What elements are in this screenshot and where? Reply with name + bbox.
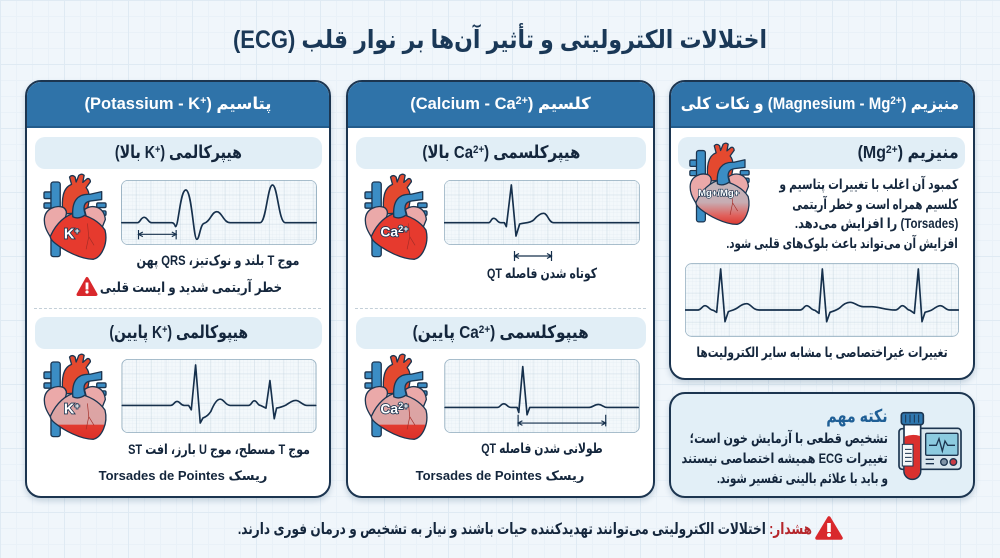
icon: heart K+: K — [64, 227, 74, 243]
potassium panel header: Potassium - K+ — [90, 95, 206, 113]
ECG chart: hypercalcemia — [444, 180, 640, 245]
icon: heart Ca2+ low: Ca — [380, 400, 398, 416]
icon: heart K+ low — [43, 354, 107, 440]
potassium panel header — [27, 82, 329, 128]
potassium panel header: پتاسیم () — [85, 95, 271, 113]
hypokalemia caption: موج T مسطح، موج U بارز، افت ST — [128, 441, 310, 457]
magnesium description: کمبود آن اغلب با تغییرات پتاسیم و — [779, 176, 958, 192]
hypercalcemia heading — [356, 137, 646, 169]
icon: heart K+: + — [74, 226, 80, 236]
magnesium heading — [678, 137, 965, 169]
QT short arrow — [513, 251, 553, 261]
calcium panel header — [348, 82, 653, 128]
magnesium description: (Torsades) را افزایش می‌دهد. — [795, 215, 958, 231]
hypercalcemia heading: هیپرکلسمی (Ca2+ بالا) — [422, 142, 580, 162]
icon: heart Mg — [689, 142, 750, 225]
icon: heart Ca2+ — [364, 174, 428, 260]
panel: important note — [669, 392, 975, 498]
panel: potassium — [25, 80, 331, 498]
icon: blood test tube and monitor — [898, 412, 962, 480]
hypocalcemia caption: طولانی شدن فاصله QT — [481, 440, 603, 456]
hypokalemia risk: ریسک Torsades de Pointes — [99, 468, 267, 483]
magnesium description — [727, 176, 958, 252]
warning footer text: هشدار: اختلالات الکترولیتی می‌توانند تهدیدکننده حیات باشند و نیاز به تشخیص و درمان فوری دارند. — [238, 521, 812, 538]
hyperkalemia heading: هیپرکالمی (K+ بالا) — [115, 142, 242, 162]
magnesium caption: تغییرات غیراختصاصی یا مشابه سایر الکترولیت‌ها — [696, 344, 948, 360]
calcium panel header: کلسیم () — [410, 95, 591, 113]
magnesium heading: منیزیم (Mg2+) — [858, 142, 959, 162]
hypocalcemia heading — [356, 317, 646, 349]
note text — [682, 430, 888, 486]
icon: footer warning triangle — [815, 516, 843, 540]
icon: heart Mg: Mg+/Mg+ — [698, 188, 740, 199]
hyperkalemia caption: موج T بلند و نوک‌تیز، QRS پهن — [136, 252, 300, 268]
ECG chart: hypocalcemia — [444, 359, 640, 433]
icon: heart K+ low: + — [74, 401, 80, 411]
hypercalcemia caption: کوتاه شدن فاصله QT — [487, 265, 597, 281]
note title: نکته مهم — [827, 406, 888, 426]
panel: magnesium — [669, 80, 975, 380]
hypocalcemia risk: ریسک Torsades de Pointes — [416, 468, 584, 483]
panel: calcium — [346, 80, 655, 498]
hyperkalemia heading — [35, 137, 322, 169]
hypokalemia heading — [35, 317, 322, 349]
hypokalemia heading: هیپوکالمی (K+ پایین) — [109, 322, 248, 342]
magnesium description: کلسیم همراه است و خطر آریتمی — [792, 196, 958, 212]
note text: و باید با علائم بالینی تفسیر شوند. — [717, 470, 888, 486]
icon: heart Ca2+ low: 2+ — [398, 401, 409, 411]
title: اختلالات الکترولیتی و تأثیر آن‌ها بر نوار قلب (ECG) — [233, 26, 767, 54]
hypocalcemia heading: هیپوکلسمی (Ca2+ پایین) — [413, 322, 589, 342]
magnesium panel header: منیزیم (Magnesium - Mg2+) و نکات کلی — [681, 95, 959, 113]
icon: heart Ca2+ low — [364, 354, 428, 440]
ECG chart: hypokalemia — [121, 359, 317, 433]
icon: heart K+ — [43, 174, 107, 260]
magnesium description: افزایش آن می‌تواند باعث بلوک‌های قلبی شود. — [727, 234, 958, 250]
note text: تشخیص قطعی با آزمایش خون است؛ — [690, 430, 888, 446]
icon: heart Ca2+: Ca — [380, 224, 398, 240]
calcium panel header: Calcium - Ca2+ — [416, 95, 528, 113]
icon: heart K+ low: K — [64, 401, 74, 417]
magnesium panel header — [671, 82, 973, 128]
ECG chart: hyperkalemia — [121, 180, 317, 245]
warning text: arrhythmia: خطر آریتمی شدید و ایست قلبی — [100, 279, 282, 295]
icon: warning triangle — [76, 276, 98, 296]
icon: heart Ca2+: 2+ — [398, 224, 409, 234]
note text: تغییرات ECG همیشه اختصاصی نیستند — [682, 450, 888, 466]
ECG chart: magnesium — [685, 263, 959, 337]
